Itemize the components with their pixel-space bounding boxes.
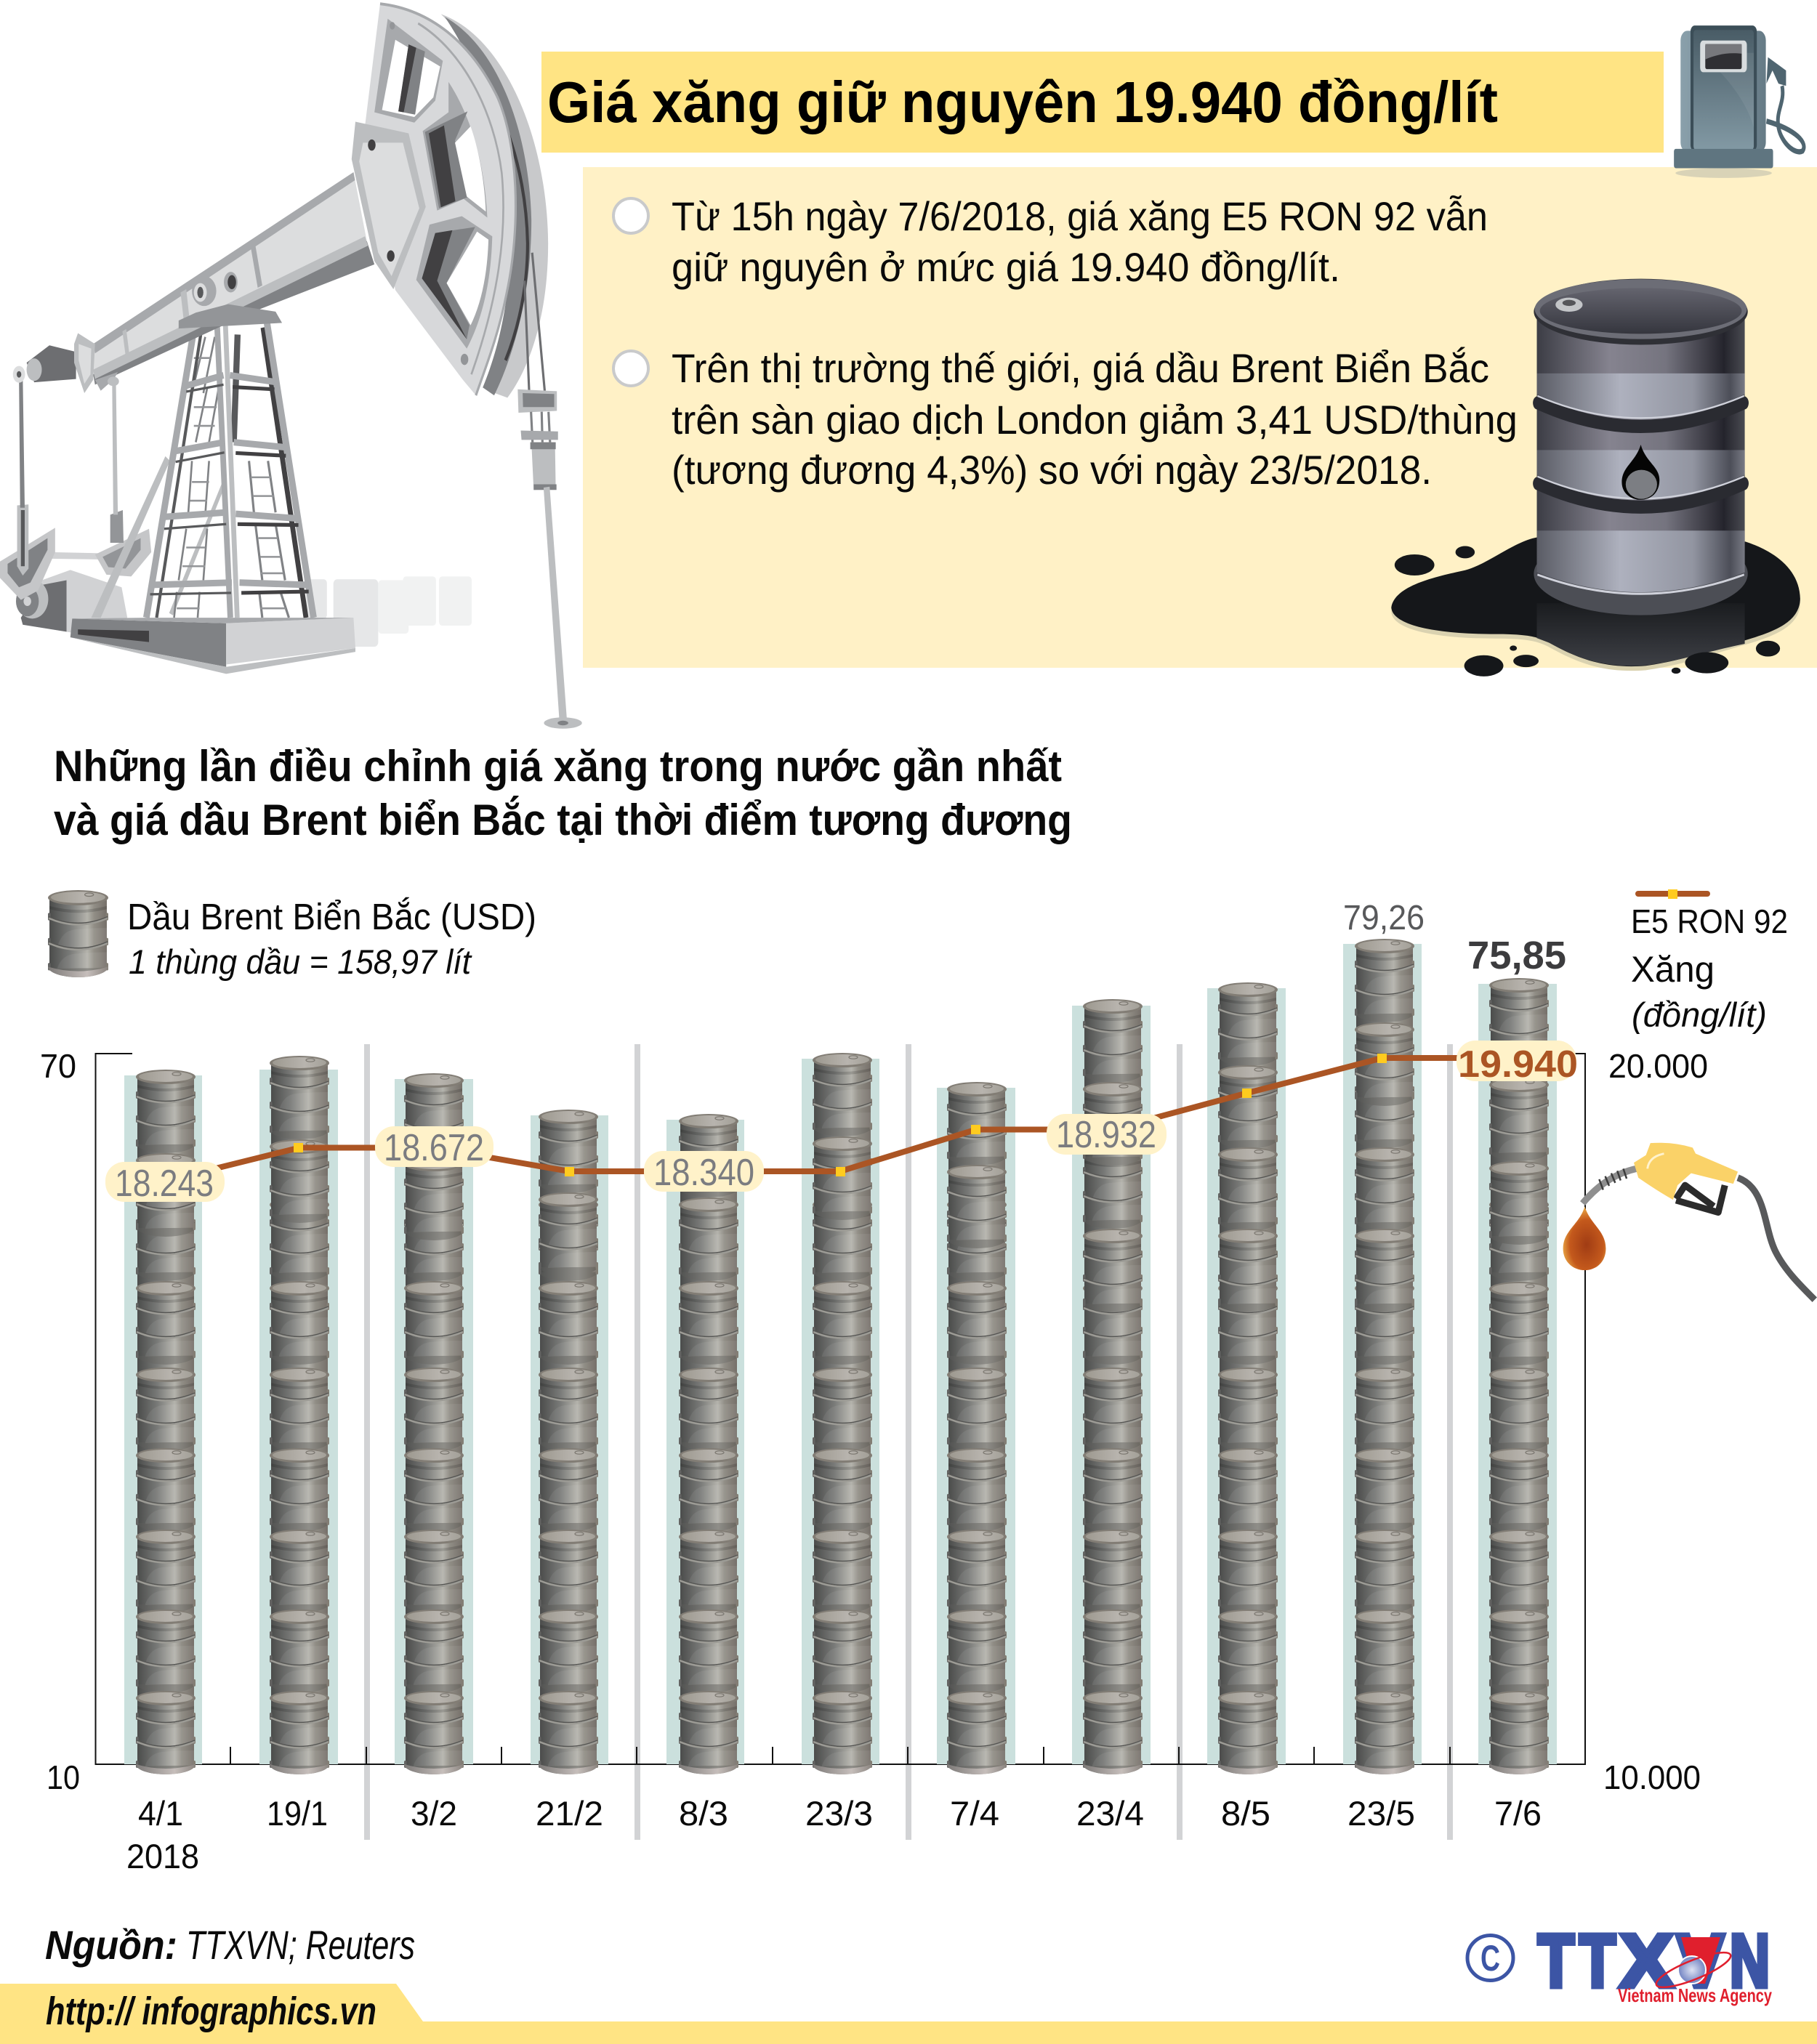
ghost barrels behind the pumpjack	[306, 576, 472, 647]
date labels: 7/4	[950, 1794, 999, 1833]
concrete base	[70, 618, 355, 674]
price label 18.340: 18.340	[653, 1152, 754, 1194]
bullet 1	[613, 198, 648, 233]
logo: TTXVN	[1467, 1919, 1772, 2006]
agency name: Vietnam News Agency	[1618, 1984, 1772, 2006]
column 8/3	[666, 1114, 744, 1774]
illustration: oil pumpjack	[0, 4, 582, 729]
column 7/4	[937, 1082, 1015, 1774]
legend: Brent oil barrels	[48, 890, 536, 981]
date labels: 23/3	[805, 1794, 873, 1833]
column 19/1	[259, 1056, 338, 1774]
price label 19.940: 19.940	[1458, 1043, 1578, 1086]
column 21/2	[531, 1110, 608, 1774]
column 23/3	[802, 1053, 879, 1774]
date labels: 23/4	[1076, 1794, 1144, 1833]
date labels: 23/5	[1347, 1794, 1415, 1833]
legend unit: (đồng/lít)	[1632, 995, 1767, 1034]
tower	[146, 315, 313, 618]
date labels: 21/2	[536, 1794, 603, 1833]
copyright mark	[1467, 1936, 1513, 1981]
icon: legend barrel	[48, 890, 108, 977]
legend label petrol: Xăng	[1631, 949, 1715, 990]
right axis labels	[1603, 1047, 1708, 1796]
date labels: 19/1	[267, 1794, 328, 1833]
text block: paragraph 2: trên sàn giao dịch London giảm 3,41 USD/thùng	[672, 397, 1518, 443]
source line: TTXVN; Reuters	[186, 1922, 415, 1968]
panel: summary background	[583, 167, 1817, 668]
date labels: 8/3	[679, 1794, 728, 1833]
agency wordmark: N	[1730, 1919, 1770, 2003]
right axis labels: 20.000	[1608, 1047, 1708, 1085]
legend line sample	[1635, 889, 1710, 899]
date labels	[126, 1794, 1542, 1875]
bearing and platform	[179, 272, 282, 328]
text block: paragraph 1: Từ 15h ngày 7/6/2018, giá xăng E5 RON 92 vẫn	[672, 193, 1488, 239]
horse head	[352, 4, 548, 397]
red accent and globe	[1653, 1937, 1734, 1994]
oil droplets	[1395, 546, 1780, 676]
column 23/5	[1343, 939, 1422, 1774]
title banner	[541, 52, 1664, 153]
axes	[96, 1054, 1585, 1764]
agency wordmark: T	[1579, 1919, 1616, 2003]
date labels: 4/1	[138, 1794, 183, 1833]
text block: paragraph 2	[672, 345, 1518, 493]
icon: fuel nozzle with drop	[1563, 1143, 1815, 1300]
left axis labels	[40, 1047, 80, 1796]
text block: paragraph 1: giữ nguyên ở mức giá 19.940 đồng/lít.	[672, 244, 1340, 290]
left axis labels: 70	[40, 1047, 76, 1085]
column 3/2	[395, 1073, 473, 1774]
divider lines	[364, 1044, 1453, 1840]
copyright mark: C	[1480, 1938, 1500, 1979]
price label 18.243: 18.243	[115, 1163, 214, 1205]
illustration: oil barrel with spill	[1391, 279, 1800, 676]
chart: barrel columns with petrol price line	[40, 899, 1708, 1875]
beam and pitman end	[13, 172, 374, 393]
agency wordmark: X	[1620, 1919, 1673, 2003]
source line	[45, 1922, 415, 1968]
price label 18.672: 18.672	[384, 1127, 484, 1169]
date labels: 8/5	[1221, 1794, 1270, 1833]
left axis labels: 10	[47, 1758, 80, 1796]
title text: Giá xăng giữ nguyên 19.940 đồng/lít	[547, 70, 1498, 134]
agency wordmark: T	[1538, 1919, 1574, 2003]
text block: paragraph 1	[672, 193, 1488, 290]
date labels: 7/6	[1494, 1794, 1542, 1833]
polished rod and bridle	[517, 253, 582, 729]
agency wordmark: V	[1677, 1919, 1724, 2003]
footer band	[0, 1984, 1817, 2044]
agency wordmark	[1538, 1919, 1770, 2003]
Brent value 75,85: 75,85	[1467, 934, 1566, 977]
icon: gas pump	[1674, 25, 1804, 178]
footer url: http:// infographics.vn	[46, 1990, 376, 2033]
date labels: 2018	[126, 1837, 199, 1875]
Brent value 79,26: 79,26	[1343, 899, 1425, 937]
chart heading	[54, 742, 1072, 844]
chart heading: Những lần điều chỉnh giá xăng trong nước gần nhất	[54, 742, 1062, 791]
right axis labels: 10.000	[1603, 1758, 1701, 1796]
chart heading: và giá dầu Brent biển Bắc tại thời điểm tương đương	[54, 796, 1072, 844]
rear engine base and counterweights	[0, 379, 227, 633]
bullet 2	[613, 351, 648, 386]
price label 18.932: 18.932	[1056, 1114, 1156, 1156]
date labels: 3/2	[411, 1794, 457, 1833]
column 8/5	[1207, 982, 1286, 1774]
column 4/1	[124, 1070, 202, 1774]
legend label: Dầu Brent Biển Bắc (USD)	[127, 896, 536, 937]
text block: paragraph 2: Trên thị trường thế giới, giá dầu Brent Biển Bắc	[672, 345, 1489, 391]
source line: Nguồn:	[45, 1922, 177, 1968]
legend label E5: E5 RON 92	[1631, 902, 1788, 940]
column 23/4	[1072, 999, 1151, 1774]
legend note: 1 thùng dầu = 158,97 lít	[129, 942, 472, 981]
legend: E5 RON 92 petrol line	[1631, 889, 1788, 1034]
petrol price line	[166, 1058, 1519, 1181]
line markers	[294, 1054, 1387, 1176]
column 7/6	[1478, 978, 1557, 1774]
text block: paragraph 2: (tương đương 4,3%) so với ngày 23/5/2018.	[672, 447, 1432, 493]
